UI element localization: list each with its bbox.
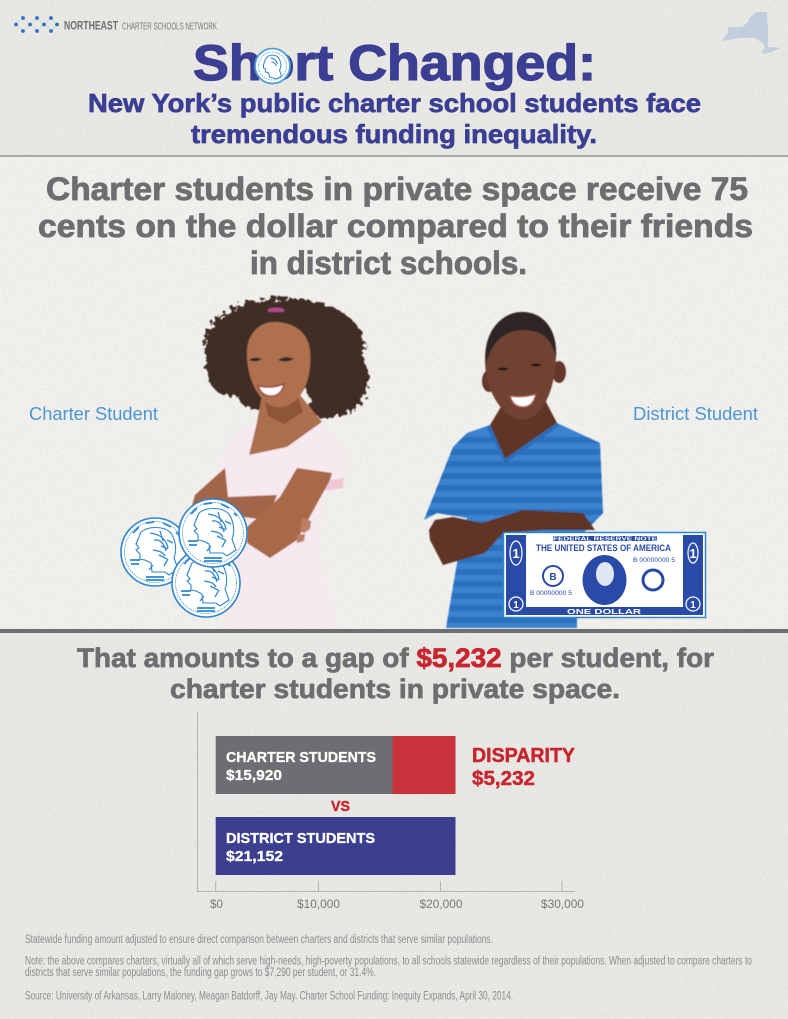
disparity label: $5,232 (472, 768, 535, 790)
subtitle: tremendous funding inequality. (191, 119, 597, 149)
icon: dime in the title (255, 48, 290, 84)
vs label: VS (331, 798, 350, 815)
hair (204, 298, 368, 417)
icon: dollar bill: 1 (512, 546, 520, 561)
bar: charter students: CHARTER STUDENTS (226, 750, 376, 766)
axis labels: $10,000 (297, 897, 340, 911)
main heading: in district schools. (250, 245, 527, 281)
label: Charter Student: Charter Student (29, 404, 158, 424)
bar chart (198, 712, 584, 911)
shirt stripes (420, 440, 610, 620)
icon: dollar bill: ONE DOLLAR (567, 607, 642, 616)
footnotes: Statewide funding amount adjusted to ensure direct comparison between charters and districts that serve similar populations. (25, 934, 493, 946)
bar: charter students: $15,920 (226, 768, 282, 784)
logo: Northeast Charter Schools Network (14, 16, 217, 33)
bar: disparity (392, 736, 456, 794)
subtitle: New York’s public charter school students face (88, 88, 701, 118)
icon: dollar bill: B 00000000 5 (530, 591, 573, 597)
gap statement heading (77, 643, 714, 704)
face (247, 322, 310, 407)
disparity label (472, 745, 576, 790)
axis labels (210, 897, 584, 911)
arms (188, 468, 277, 530)
bar: charter students (216, 736, 392, 794)
main heading: Charter students in private space receive 75 (46, 171, 748, 207)
subtitle (88, 88, 701, 149)
axis labels: $0 (210, 897, 223, 911)
photo: charter student girl (188, 298, 368, 628)
icon: dollar bill: 1 (513, 600, 519, 611)
crossed arms (429, 510, 595, 565)
logo: Northeast Charter Schools Network: CHARTER SCHOOLS NETWORK (122, 20, 217, 32)
head (485, 312, 556, 420)
footnotes: Source: University of Arkansas, Larry Maloney, Meagan Batdorff, Jay May. Charter School Funding: Inequity Expands, April 30, 2014. (25, 990, 513, 1002)
collar (487, 423, 559, 463)
icon: New York state map (723, 12, 780, 54)
footnotes: districts that serve similar populations, the funding gap grows to $7,290 per student, or 31.4%. (25, 967, 376, 979)
gap statement heading: That amounts to a gap of $5,232 per student, for (77, 643, 714, 673)
chart axes (198, 712, 575, 892)
icon: quarters (121, 499, 247, 617)
shirt (218, 422, 346, 628)
icon: dollar bill: 1 (689, 546, 697, 561)
neck (490, 400, 557, 459)
icon: dollar bill: B (549, 572, 557, 583)
footnotes (25, 934, 752, 1002)
logo: Northeast Charter Schools Network: NORTHEAST (64, 18, 118, 32)
neck and chest (249, 395, 322, 455)
axis labels: $20,000 (420, 897, 463, 911)
ears (482, 370, 496, 392)
icon: dollar bill: THE UNITED STATES OF AMERICA (536, 543, 671, 554)
icon: dollar bill: FEDERAL RESERVE NOTE (553, 536, 658, 542)
gap statement heading: charter students in private space. (170, 674, 620, 704)
bar: district students: $21,152 (226, 849, 283, 865)
title: Short Changed: (193, 35, 596, 91)
label: District Student: District Student (633, 404, 758, 424)
axis labels: $30,000 (541, 897, 584, 911)
icon: dollar bill: B 00000000 5 (633, 558, 676, 564)
disparity label: DISPARITY (472, 745, 576, 767)
bar: district students: DISTRICT STUDENTS (226, 831, 375, 847)
icon: dollar bill (504, 532, 706, 618)
main heading: cents on the dollar compared to their friends (38, 208, 753, 244)
icon: dollar bill: 1 (690, 600, 696, 611)
main heading (38, 171, 753, 281)
shirt (424, 423, 603, 628)
bar: district students (216, 817, 456, 875)
photo: district student boy (420, 312, 610, 628)
